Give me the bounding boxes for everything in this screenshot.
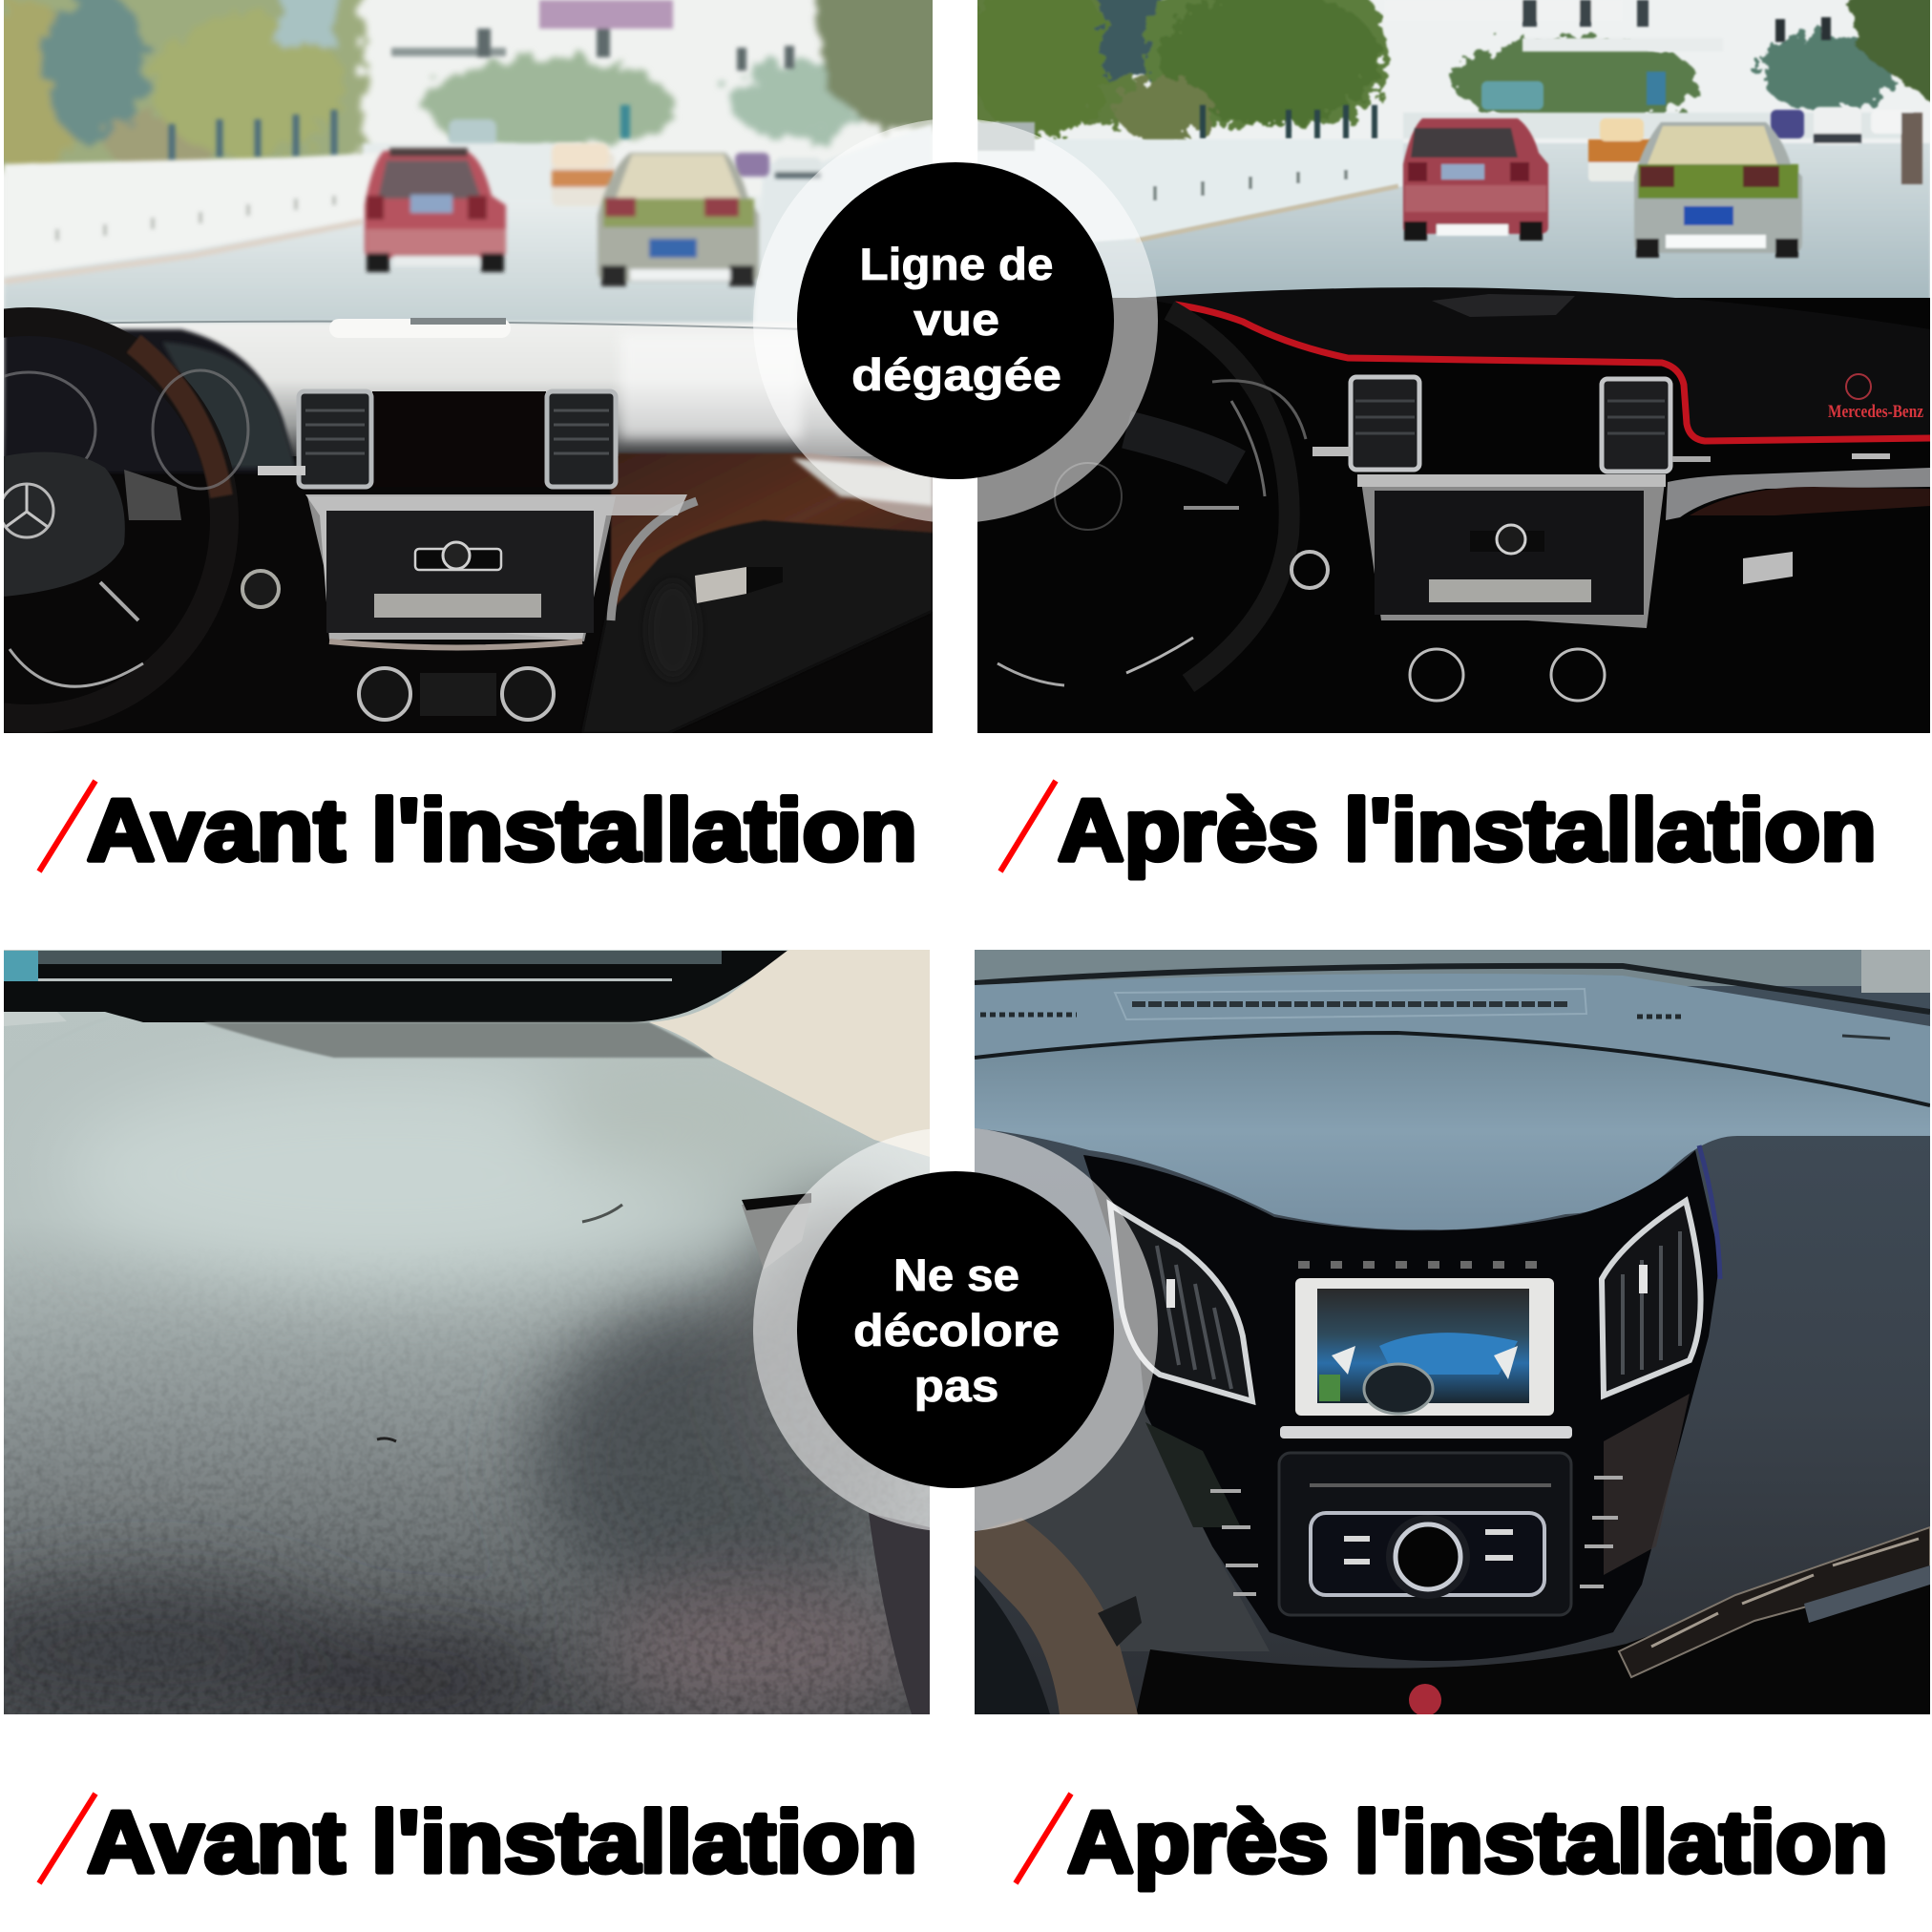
callout text: Ligne de xyxy=(859,239,1054,289)
leather light and shadow xyxy=(0,1050,945,1728)
black circle xyxy=(797,162,1114,479)
dashboard base black xyxy=(977,298,1930,733)
piano black center stack xyxy=(1083,1145,1720,1661)
green car xyxy=(598,153,759,286)
lower pillar xyxy=(869,1513,930,1714)
callout text: décolore xyxy=(853,1305,1060,1355)
console knobs and glovebox handle xyxy=(242,567,783,720)
mat logo xyxy=(1828,374,1923,422)
blurred trees xyxy=(0,0,955,172)
top dash with speaker slots xyxy=(975,974,1930,1107)
halo ring xyxy=(753,118,1158,523)
windshield band xyxy=(4,951,788,1026)
road and barrier xyxy=(977,113,1930,305)
right vent xyxy=(1602,1201,1701,1396)
halo ring xyxy=(753,1127,1158,1532)
steering wheel xyxy=(0,322,248,719)
panel: after, dashboard with mat xyxy=(975,950,1930,1716)
green car xyxy=(1634,122,1802,258)
steering wheel rim xyxy=(975,1518,1142,1714)
red emblem xyxy=(1409,1684,1441,1716)
background cars xyxy=(1588,107,1922,184)
signs and trunks xyxy=(1203,0,1831,138)
heading: after bottom: Après l'installation xyxy=(1067,1794,1888,1891)
center console xyxy=(1357,474,1666,628)
black circle xyxy=(797,1171,1114,1488)
tablet screen xyxy=(1295,1278,1554,1416)
callout: does not fade xyxy=(753,1127,1158,1532)
callout text: Ne se xyxy=(893,1250,1019,1300)
dark wedge and slit xyxy=(377,1193,811,1441)
left vent xyxy=(1110,1205,1252,1401)
callout text: vue xyxy=(914,294,999,345)
panel: before, clear view photo xyxy=(0,0,955,733)
padded hood xyxy=(975,1033,1930,1229)
vents and screen xyxy=(1312,377,1711,475)
hazy dashboard top xyxy=(4,318,873,456)
center console xyxy=(305,494,687,647)
right dash strip and handle xyxy=(1666,453,1930,584)
audio controls xyxy=(1279,1453,1571,1615)
dash mat with red edge xyxy=(1136,287,1930,441)
status icons strip xyxy=(1298,1261,1546,1269)
Mercedes star xyxy=(0,484,53,537)
trees xyxy=(955,0,1932,143)
callout text xyxy=(851,239,1061,400)
background cars xyxy=(552,143,821,206)
panel: before, faded leather dashboard xyxy=(0,950,945,1728)
windshield band xyxy=(975,950,1930,1012)
panel: after, dash mat photo xyxy=(955,0,1932,733)
callout text xyxy=(853,1250,1060,1411)
cream pillar xyxy=(649,950,930,1157)
heading: before bottom: Avant l'installation xyxy=(87,1794,917,1891)
road and barrier xyxy=(4,124,933,325)
heading: before top: Avant l'installation xyxy=(87,782,917,879)
steering wheel xyxy=(998,310,1306,685)
wood trim xyxy=(1619,1527,1930,1677)
center vents and screen xyxy=(258,391,616,487)
lower left dash xyxy=(975,1317,1270,1651)
leather grain texture xyxy=(4,1193,930,1714)
chrome bar xyxy=(1280,1426,1572,1438)
heading: after top: Après l'installation xyxy=(1058,782,1877,879)
lower black area xyxy=(1136,1537,1930,1714)
road signs and poles xyxy=(172,0,794,162)
lower dashboard black xyxy=(4,329,933,733)
callout text: pas xyxy=(914,1360,998,1411)
callout text: dégagée xyxy=(851,349,1061,400)
knobs and ring xyxy=(1292,552,1605,701)
inner dark strip xyxy=(203,1022,716,1058)
red car xyxy=(1403,118,1548,241)
red car xyxy=(365,148,506,272)
callout: clear line of sight xyxy=(753,118,1158,523)
wood trim xyxy=(611,453,933,620)
side buttons xyxy=(1210,1478,1623,1594)
